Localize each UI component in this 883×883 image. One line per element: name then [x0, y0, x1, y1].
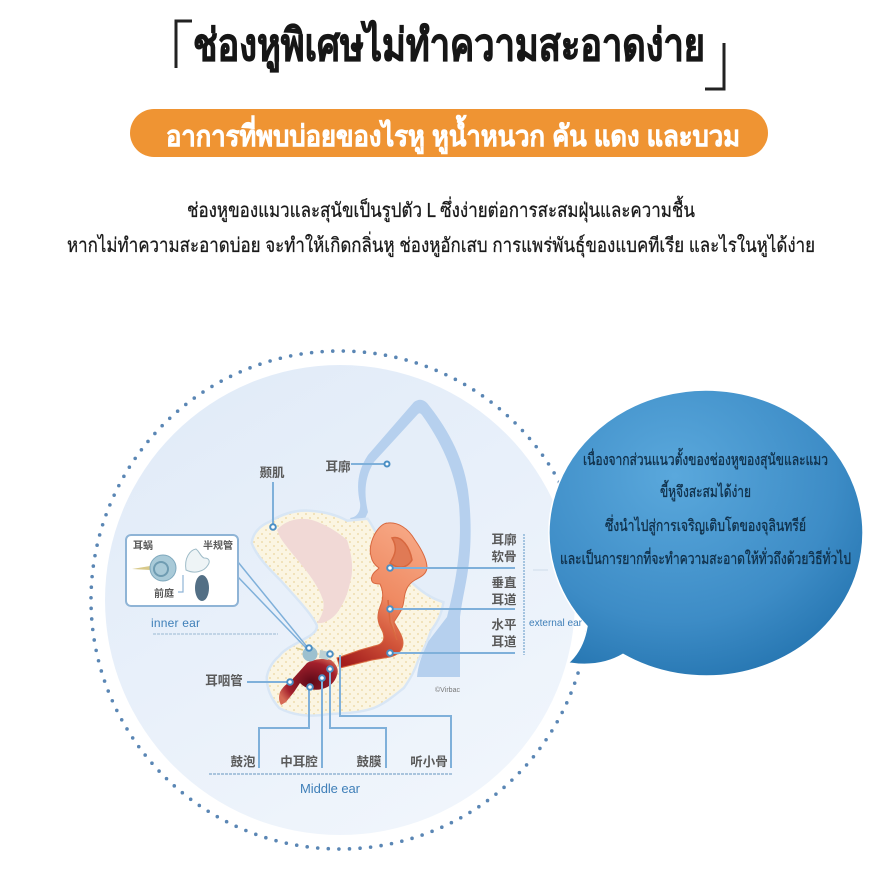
diagram labels: 中耳腔 [280, 751, 318, 770]
intro text [67, 196, 815, 258]
title left bracket [176, 21, 192, 68]
temporal muscle [277, 519, 352, 623]
diagram labels: inner ear [151, 616, 200, 630]
middle ear cavity [279, 659, 338, 705]
cochlea blob [296, 646, 330, 662]
diagram labels: 垂直 [491, 572, 517, 591]
title right bracket [705, 43, 724, 89]
inner ear inset: 半规管 [203, 537, 233, 552]
surrounding tissue [253, 512, 442, 714]
diagram labels: 耳廓 [491, 529, 517, 548]
diagram labels: 耳廓 [325, 456, 351, 475]
title [176, 19, 724, 89]
bubble text: ซึ่งนำไปสู่การเจริญเติบโตของจุลินทรีย์ [605, 514, 806, 536]
diagram labels: 软骨 [491, 546, 517, 565]
title text: ช่องหูพิเศษไม่ทำความสะอาดง่าย [193, 19, 705, 72]
inner ear inset: 耳蜗 [133, 537, 153, 552]
diagram labels: 耳道 [491, 631, 517, 650]
orange banner: อาการที่พบบ่อยของไรหู หูน้ำหนวก คัน แดง และบวม [166, 114, 740, 154]
bubble text [560, 448, 851, 568]
speech bubble [549, 390, 863, 676]
dotted outer ring [91, 351, 589, 849]
diagram labels: 听小骨 [410, 751, 448, 770]
inner ear inset [126, 535, 238, 606]
intro text: ช่องหูของแมวและสุนัขเป็นรูปตัว L ซึ่งง่ายต่อการสะสมฝุ่นและความชื้น [187, 196, 695, 223]
orange banner [130, 109, 768, 157]
bubble text: ขี้หูจึงสะสมได้ง่าย [660, 480, 751, 502]
pale circle panel [105, 365, 575, 835]
diagram labels: 耳道 [491, 589, 517, 608]
pinna inner fill [360, 413, 460, 643]
flap inner folds [388, 538, 412, 640]
outer ear flap and canal [337, 523, 427, 668]
external ear label: external ear [529, 618, 583, 629]
inner ear inset: 前庭 [154, 585, 174, 600]
diagram labels: 颞肌 [259, 462, 285, 481]
callout lines [153, 464, 548, 774]
callout nodes [270, 462, 393, 690]
diagram labels: Middle ear [300, 781, 361, 796]
diagram labels: 耳咽管 [205, 670, 243, 689]
diagram labels: 鼓膜 [356, 751, 382, 770]
outer pinna silhouette [350, 400, 471, 677]
diagram labels: ©Virbac [435, 686, 460, 694]
diagram labels: 鼓泡 [230, 751, 256, 770]
diagram labels: 水平 [491, 614, 517, 633]
ear anatomy diagram [126, 400, 548, 796]
diagram labels [151, 456, 517, 796]
